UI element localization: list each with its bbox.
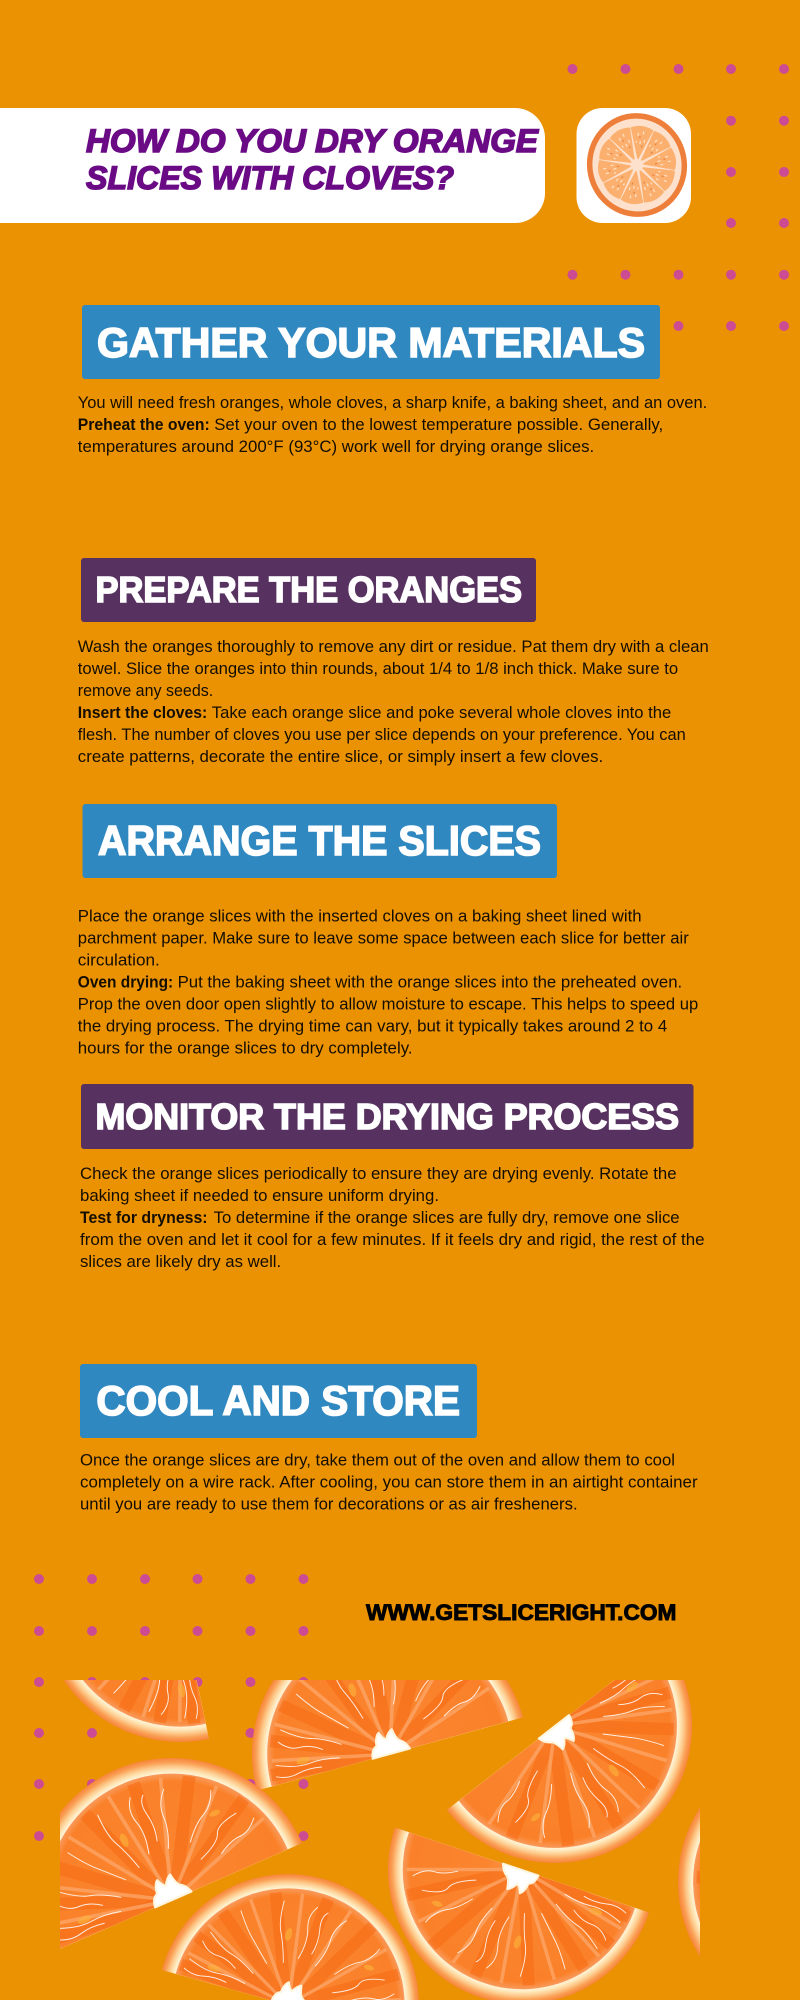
text block: prepare the oranges: Wash the oranges thoroughly to remove any dirt or residue. Pat them dry with a clean (78, 638, 709, 656)
text block: prepare the oranges: flesh. The number of cloves you use per slice depends on your preference. You can (78, 726, 686, 744)
text block: arrange the slices: Place the orange slices with the inserted cloves on a baking sheet lined with (78, 908, 642, 926)
heading: cool and store: COOL AND STORE (96, 1377, 460, 1424)
panel: cool and store (80, 1364, 698, 1514)
text block: monitor the drying process: To determine if the orange slices are fully dry, remove one slice (214, 1209, 680, 1227)
panel: prepare the oranges (78, 558, 709, 766)
orange slice: right edge sliver (678, 1808, 700, 1956)
orange slice: top middle (252, 1680, 523, 1790)
panel: monitor the drying process (80, 1084, 705, 1271)
text block: cool and store: until you are ready to use them for decorations or as air fresheners. (80, 1496, 578, 1514)
text block: arrange the slices: Prop the oven door open slightly to allow moisture to escape. This helps to speed up (78, 996, 698, 1014)
heading: cool and store (80, 1364, 477, 1438)
heading: gather your materials (82, 305, 660, 379)
heading: prepare the oranges (81, 558, 536, 622)
heading: arrange the slices: ARRANGE THE SLICES (98, 817, 541, 864)
text block: prepare the oranges (78, 638, 709, 766)
text block: arrange the slices: parchment paper. Make sure to leave some space between each slice for better air (78, 930, 689, 948)
heading: prepare the oranges: PREPARE THE ORANGES (96, 569, 522, 610)
heading: gather your materials: GATHER YOUR MATERIALS (97, 319, 645, 366)
dot pattern: top right (568, 64, 789, 331)
text block: arrange the slices: circulation. (78, 952, 160, 970)
text block: gather your materials: You will need fresh oranges, whole cloves, a sharp knife, a baking sheet, and an oven. (78, 394, 707, 412)
orange slice: large left (60, 1758, 302, 1949)
heading: arrange the slices (82, 804, 557, 878)
orange slice: top left (64, 1680, 209, 1742)
text block: monitor the drying process: Test for dryness: (80, 1209, 208, 1227)
text block: arrange the slices (78, 908, 698, 1058)
text block: cool and store: completely on a wire rack. After cooling, you can store them in an airtight container (80, 1474, 698, 1492)
title: HOW DO YOU DRY ORANGE (86, 123, 539, 159)
icon: orange slice badge (576, 104, 697, 226)
text block: prepare the oranges: Take each orange slice and poke several whole cloves into the (212, 704, 671, 722)
text block: prepare the oranges: Insert the cloves: (78, 704, 207, 722)
title (86, 123, 539, 196)
panel: gather your materials (78, 305, 707, 456)
text block: gather your materials: Preheat the oven: (78, 416, 210, 434)
heading: monitor the drying process: MONITOR THE DRYING PROCESS (96, 1096, 679, 1137)
orange slice: top right (446, 1680, 692, 1863)
illustration: orange slices (60, 1680, 700, 2000)
text block: prepare the oranges: towel. Slice the oranges into thin rounds, about 1/4 to 1/8 inch thick. Make sure to (78, 660, 678, 678)
panel: title banner (0, 108, 545, 223)
text block: gather your materials (78, 394, 707, 456)
orange slice: bottom right (388, 1828, 649, 2000)
text block: monitor the drying process: Check the orange slices periodically to ensure they are drying evenly. Rotate the (80, 1165, 677, 1183)
heading: monitor the drying process (81, 1084, 694, 1149)
dot pattern: bottom left (34, 1574, 308, 1841)
text block: monitor the drying process: from the oven and let it cool for a few minutes. If it feels dry and rigid, the rest of the (80, 1231, 705, 1249)
text block: monitor the drying process: baking sheet if needed to ensure uniform drying. (80, 1187, 439, 1205)
text block: monitor the drying process: slices are likely dry as well. (80, 1253, 281, 1271)
text block: gather your materials: temperatures around 200°F (93°C) work well for drying orange slices. (78, 438, 594, 456)
text block: arrange the slices: Oven drying: (78, 974, 173, 992)
text block: prepare the oranges: create patterns, decorate the entire slice, or simply insert a few cloves. (78, 748, 603, 766)
orange slice: bottom centre (162, 1874, 419, 2000)
text block: prepare the oranges: remove any seeds. (78, 682, 213, 700)
text block: arrange the slices: hours for the orange slices to dry completely. (78, 1040, 413, 1058)
website url: WWW.GETSLICERIGHT.COM (366, 1600, 676, 1625)
text block: cool and store: Once the orange slices are dry, take them out of the oven and allow them to cool (80, 1452, 675, 1470)
title: SLICES WITH CLOVES? (86, 160, 454, 196)
text block: arrange the slices: the drying process. The drying time can vary, but it typically takes around 2 to 4 (78, 1018, 667, 1036)
text block: arrange the slices: Put the baking sheet with the orange slices into the preheated oven. (178, 974, 682, 992)
text block: monitor the drying process (80, 1165, 705, 1271)
text block: gather your materials: Set your oven to the lowest temperature possible. Generally, (214, 416, 663, 434)
panel: arrange the slices (78, 804, 698, 1058)
text block: cool and store (80, 1452, 698, 1514)
